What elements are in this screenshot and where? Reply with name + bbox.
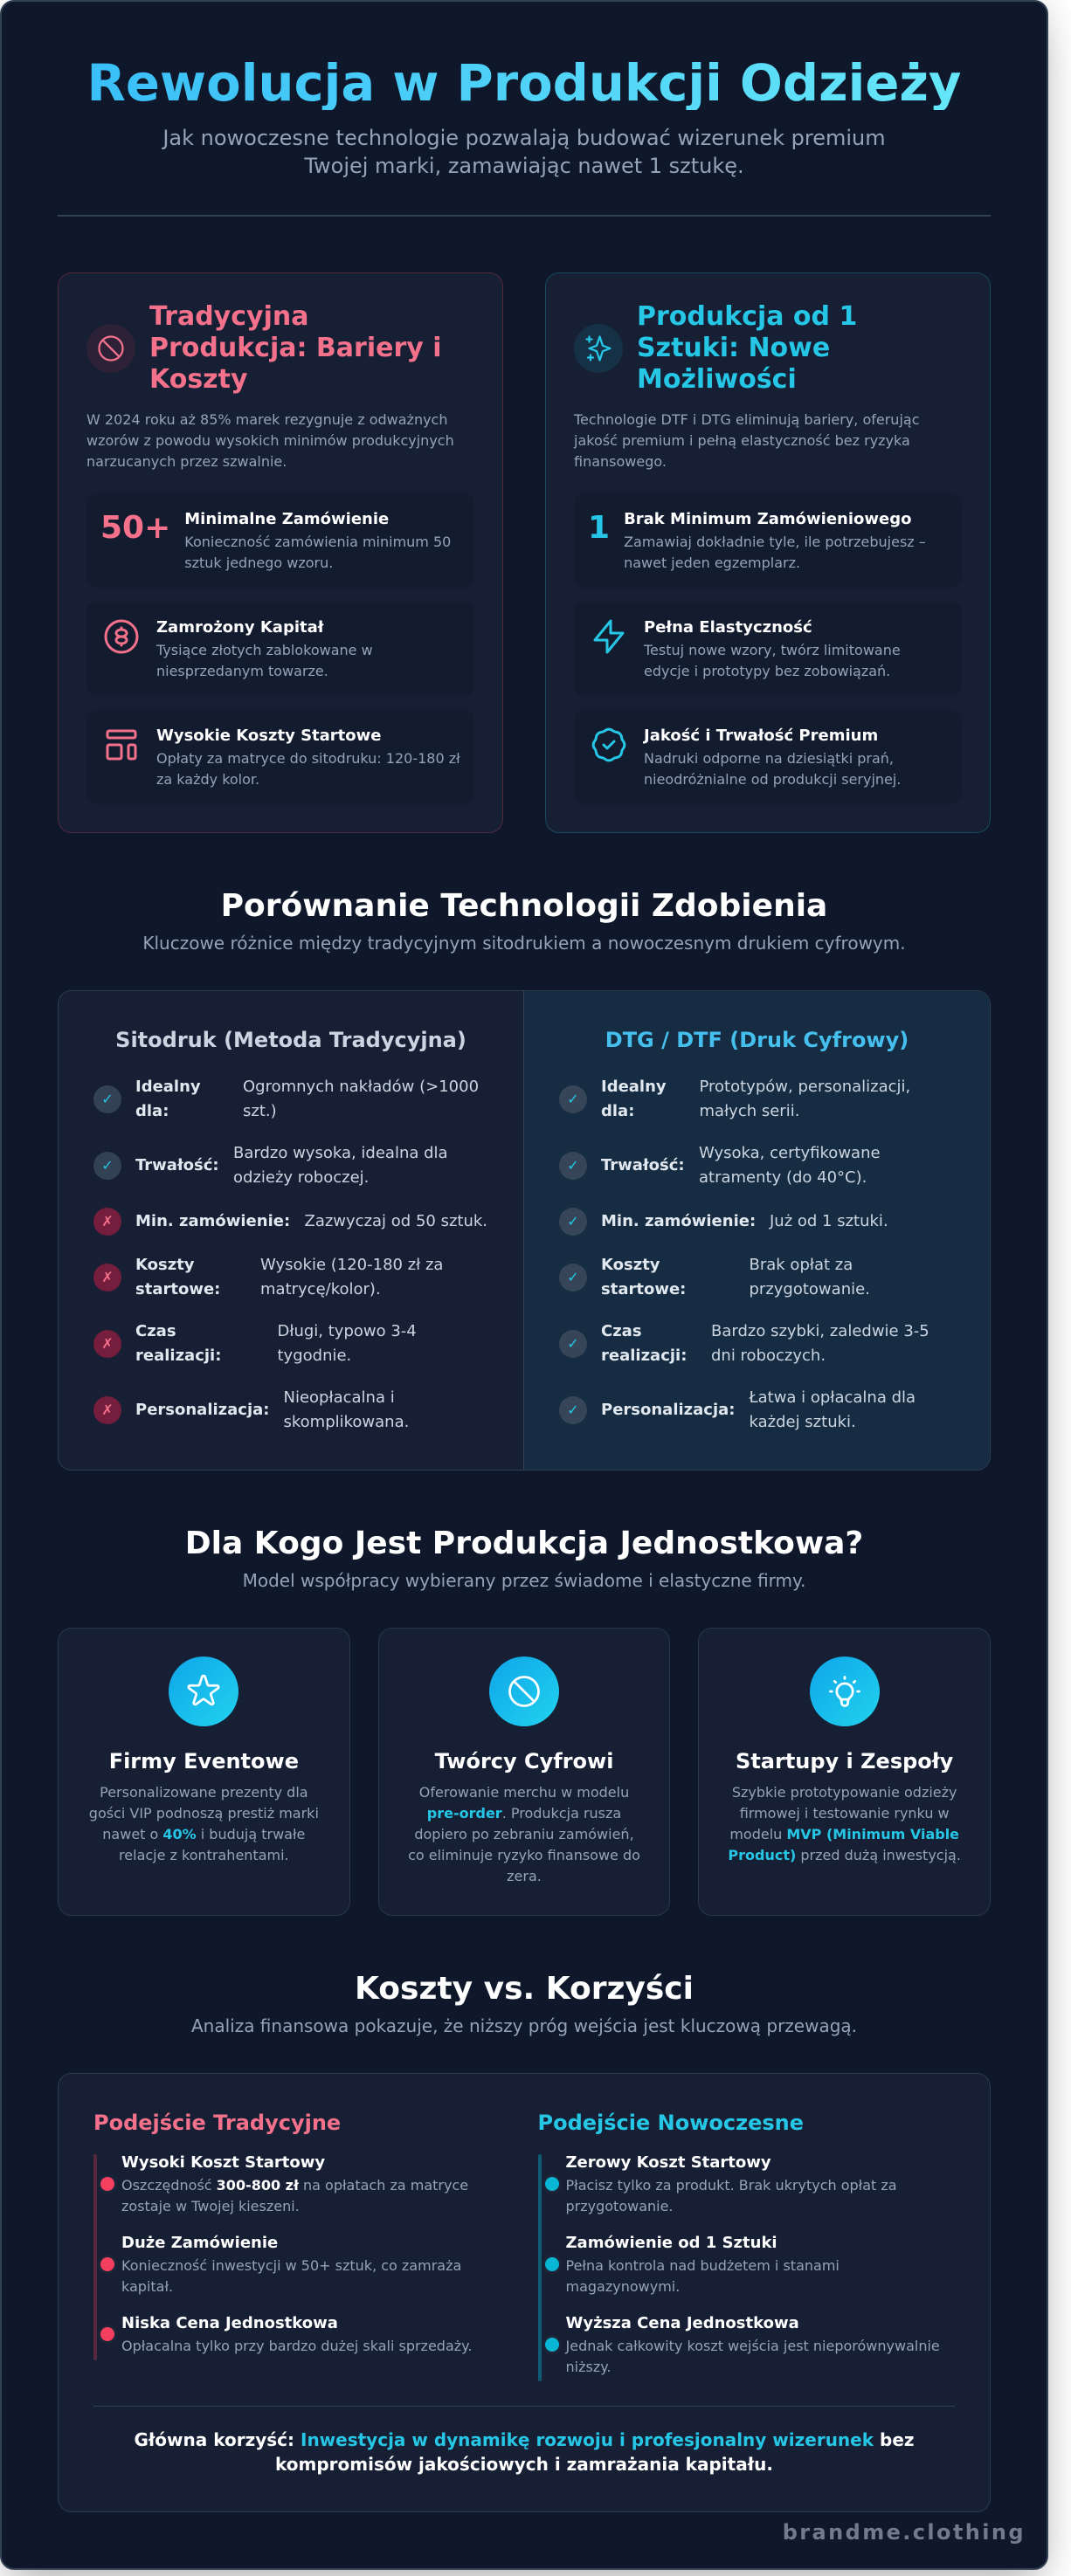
column: screen printing: Sitodruk (Metoda Tradycyjna) bbox=[115, 1028, 466, 1052]
card: startups: Startupy i Zespoły bbox=[736, 1749, 953, 1774]
row: personalization: Łatwa i opłacalna dla bbox=[750, 1388, 916, 1407]
stat: flexibility: Testuj nowe wzory, twórz limitowane bbox=[644, 642, 901, 658]
stat: premium quality bbox=[574, 710, 962, 804]
icon: ban bbox=[489, 1656, 559, 1726]
item: high startup cost: Oszczędność 300-800 zł na opłatach za matryce bbox=[121, 2177, 468, 2194]
intro text: traditional bbox=[86, 411, 454, 470]
item: large order: Konieczność inwestycji w 50+ sztuk, co zamraża bbox=[121, 2257, 461, 2274]
card: event companies: nawet o 40% i budują trwałe bbox=[102, 1826, 305, 1842]
row: durability: ✓ bbox=[101, 1157, 114, 1174]
row: minimum order: Zazwyczaj od 50 sztuk. bbox=[304, 1212, 487, 1230]
stat: minimum order bbox=[86, 493, 474, 588]
row: lead time bbox=[559, 1322, 929, 1365]
card: digital creators: co eliminuje ryzyko finansowe do bbox=[408, 1847, 640, 1863]
column: screen printing bbox=[93, 1028, 487, 1431]
column: traditional approach bbox=[93, 2111, 472, 2360]
section heading: audience: Model współpracy wybierany przez świadome i elastyczne firmy. bbox=[243, 1570, 805, 1591]
row: ideal for bbox=[93, 1078, 479, 1120]
row: minimum order: Min. zamówienie: bbox=[135, 1212, 290, 1230]
section heading: audience bbox=[185, 1526, 863, 1591]
timeline: modern bbox=[538, 2153, 940, 2381]
row: lead time: Długi, typowo 3-4 bbox=[278, 1322, 417, 1340]
stat: no minimum bbox=[574, 493, 962, 588]
card: digital creators: Oferowanie merchu w modelu bbox=[419, 1784, 629, 1801]
row: startup costs: matrycę/kolor). bbox=[260, 1280, 381, 1298]
item: high startup cost: zostaje w Twojej kieszeni. bbox=[121, 2198, 300, 2214]
row: startup costs: Koszty bbox=[601, 1256, 660, 1274]
row: minimum order: Już od 1 sztuki. bbox=[770, 1212, 888, 1230]
icon: light bulb bbox=[810, 1656, 880, 1726]
card: startups: Product) przed dużą inwestycją. bbox=[728, 1847, 961, 1863]
item: order from one: Pełna kontrola nad budżetem i stanami bbox=[566, 2257, 840, 2274]
row: startup costs: startowe: bbox=[135, 1280, 220, 1298]
item: order from one: magazynowymi. bbox=[566, 2278, 680, 2295]
row: lead time bbox=[93, 1322, 417, 1365]
item: large order bbox=[100, 2234, 461, 2295]
item: large order: Duże Zamówienie bbox=[121, 2234, 278, 2252]
card: startups: firmowej i testowanie rynku w bbox=[740, 1805, 950, 1822]
row: ideal for bbox=[559, 1078, 910, 1120]
item: large order: kapitał. bbox=[121, 2278, 173, 2295]
section heading: comparison: Kluczowe różnice między tradycyjnym sitodrukiem a nowoczesnym drukiem cyfrowym. bbox=[142, 933, 906, 954]
subtitle bbox=[162, 126, 886, 178]
section heading: comparison bbox=[142, 888, 906, 954]
intro text: modern: finansowego. bbox=[574, 453, 667, 470]
heading: modern: Możliwości bbox=[637, 364, 797, 395]
row: personalization: Nieopłacalna i bbox=[283, 1388, 395, 1407]
conclusion callout: Główna korzyść: Inwestycja w dynamikę rozwoju i profesjonalny wizerunek bez bbox=[134, 2429, 915, 2450]
row: personalization: Personalizacja: bbox=[601, 1401, 735, 1419]
item: higher unit price: Jednak całkowity koszt wejścia jest nieporównywalnie bbox=[566, 2338, 940, 2354]
row: ideal for: Ogromnych nakładów (>1000 bbox=[243, 1078, 479, 1096]
row: ideal for: ✓ bbox=[567, 1091, 579, 1107]
stat: premium quality: nieodróżnialne od produkcji seryjnej. bbox=[644, 771, 901, 788]
brand footer: brandme.clothing bbox=[783, 2520, 1026, 2545]
section heading: costs: Analiza finansowa pokazuje, że niższy próg wejścia jest kluczową przewagą. bbox=[191, 2015, 857, 2036]
item: higher unit price: niższy. bbox=[566, 2359, 612, 2375]
icon: star bbox=[169, 1656, 238, 1726]
row: durability: Wysoka, certyfikowane bbox=[699, 1144, 881, 1162]
column: modern approach: Podejście Nowoczesne bbox=[538, 2111, 804, 2135]
row: ideal for: ✓ bbox=[101, 1091, 114, 1107]
stat: no minimum: Brak Minimum Zamówieniowego bbox=[624, 510, 911, 528]
row: durability: Trwałość: bbox=[135, 1156, 219, 1174]
item: higher unit price: Wyższa Cena Jednostkowa bbox=[566, 2314, 799, 2332]
row: personalization: Personalizacja: bbox=[135, 1401, 269, 1419]
row: ideal for: szt.) bbox=[243, 1102, 277, 1120]
intro text: traditional: wzorów z powodu wysokich minimów produkcyjnych bbox=[86, 432, 454, 449]
section heading: costs: Koszty vs. Korzyści bbox=[355, 1971, 694, 2007]
section heading: costs bbox=[191, 1971, 857, 2036]
two approach columns bbox=[93, 2111, 940, 2381]
row: minimum order: ✗ bbox=[101, 1213, 114, 1229]
stat: minimum order: sztuk jednego wzoru. bbox=[184, 554, 333, 571]
row: minimum order bbox=[93, 1208, 487, 1236]
stat: premium quality: Jakość i Trwałość Premium bbox=[644, 727, 878, 745]
row: startup costs: ✓ bbox=[567, 1269, 579, 1285]
stat: no minimum: Zamawiaj dokładnie tyle, ile potrzebujesz – bbox=[624, 534, 926, 550]
row: durability bbox=[559, 1144, 881, 1187]
row: durability bbox=[93, 1144, 448, 1187]
row: lead time: realizacji: bbox=[601, 1347, 687, 1365]
column: traditional approach: Podejście Tradycyjne bbox=[93, 2111, 341, 2135]
row: durability: Bardzo wysoka, idealna dla bbox=[233, 1144, 448, 1162]
row: lead time: ✓ bbox=[567, 1335, 579, 1352]
card: event companies: Personalizowane prezenty dla bbox=[100, 1784, 308, 1801]
intro text: modern bbox=[573, 411, 919, 470]
stat: minimum order: Konieczność zamówienia minimum 50 bbox=[184, 534, 451, 550]
panel heading: traditional bbox=[86, 301, 442, 395]
column: digital printing: DTG / DTF (Druk Cyfrowy) bbox=[605, 1028, 909, 1052]
column: modern approach bbox=[538, 2111, 940, 2381]
item: low unit price: Niska Cena Jednostkowa bbox=[121, 2314, 338, 2332]
row: minimum order: Min. zamówienie: bbox=[601, 1212, 756, 1230]
heading: traditional bbox=[149, 301, 442, 395]
heading: traditional: Koszty bbox=[149, 364, 248, 395]
stat: minimum order: 50+ bbox=[100, 510, 170, 546]
card: event companies bbox=[58, 1628, 350, 1916]
row: personalization: każdej sztuki. bbox=[750, 1413, 856, 1431]
card: digital creators bbox=[378, 1628, 670, 1916]
heading: modern bbox=[637, 301, 857, 395]
stat: startup costs: Wysokie Koszty Startowe bbox=[156, 727, 381, 745]
stat: frozen capital: Tysiące złotych zablokowane w bbox=[156, 642, 373, 658]
stat: startup costs bbox=[86, 710, 474, 804]
row: personalization bbox=[93, 1388, 409, 1431]
row: ideal for: małych serii. bbox=[699, 1102, 799, 1120]
item: zero startup cost: Płacisz tylko za produkt. Brak ukrytych opłat za bbox=[566, 2177, 897, 2194]
stat list: traditional bbox=[100, 510, 460, 788]
row: startup costs: Koszty bbox=[135, 1256, 195, 1274]
stat: flexibility: Pełna Elastyczność bbox=[644, 618, 812, 637]
panel: production from one piece bbox=[545, 272, 991, 833]
two comparison panels bbox=[58, 272, 991, 833]
intro text: modern: jakość premium i pełną elastyczność bez ryzyka bbox=[574, 432, 910, 449]
card: digital creators: Twórcy Cyfrowi bbox=[435, 1749, 613, 1774]
row: startup costs: Brak opłat za bbox=[750, 1256, 853, 1274]
stat list: modern bbox=[588, 510, 926, 788]
item: order from one bbox=[545, 2234, 840, 2295]
icon: sparkles bbox=[574, 324, 623, 373]
heading: modern: Sztuki: Nowe bbox=[637, 333, 830, 363]
card: startups: modelu MVP (Minimum Viable bbox=[729, 1826, 959, 1842]
item: high startup cost bbox=[100, 2153, 468, 2214]
card: digital creators: dopiero po zebraniu zamówień, bbox=[414, 1826, 634, 1842]
conclusion callout: kompromisów jakościowych i zamrażania kapitału. bbox=[275, 2454, 773, 2475]
row: lead time: ✗ bbox=[101, 1335, 114, 1352]
panel heading: modern bbox=[574, 301, 857, 395]
row: startup costs: Wysokie (120-180 zł za bbox=[260, 1256, 443, 1274]
row: durability: atramenty (do 40°C). bbox=[699, 1168, 867, 1187]
row: lead time: realizacji: bbox=[135, 1347, 221, 1365]
row: lead time: tygodnie. bbox=[278, 1347, 351, 1365]
row: minimum order bbox=[559, 1208, 888, 1236]
timeline: traditional bbox=[93, 2153, 472, 2360]
intro text: modern: Technologie DTF i DTG eliminują bariery, oferując bbox=[574, 411, 919, 428]
stat: minimum order: Minimalne Zamówienie bbox=[184, 510, 389, 528]
heading: traditional: Produkcja: Bariery i bbox=[149, 333, 442, 363]
row: durability: ✓ bbox=[567, 1157, 579, 1174]
heading: traditional: Tradycyjna bbox=[149, 301, 308, 332]
row: ideal for: dla: bbox=[601, 1102, 634, 1120]
comparison table bbox=[58, 990, 991, 1471]
column: digital printing bbox=[523, 991, 990, 1470]
stat: no minimum: nawet jeden egzemplarz. bbox=[624, 554, 800, 571]
row: lead time: dni roboczych. bbox=[711, 1347, 826, 1365]
card: event companies: Firmy Eventowe bbox=[109, 1749, 299, 1774]
row: ideal for: Idealny bbox=[135, 1078, 201, 1096]
row: ideal for: dla: bbox=[135, 1102, 169, 1120]
intro text: traditional: narzucanych przez szwalnie. bbox=[86, 453, 287, 470]
section heading: comparison: Porównanie Technologii Zdobienia bbox=[221, 888, 827, 924]
row: durability: odzieży roboczej. bbox=[233, 1168, 369, 1187]
heading: modern: Produkcja od 1 bbox=[637, 301, 857, 332]
stat: startup costs: Opłaty za matryce do sitodruku: 120-180 zł bbox=[156, 750, 460, 767]
panel: costs vs benefits bbox=[58, 2073, 991, 2512]
card: startups: Szybkie prototypowanie odzieży bbox=[732, 1784, 957, 1801]
row: personalization bbox=[559, 1388, 916, 1431]
card: digital creators: zera. bbox=[507, 1868, 542, 1884]
item: zero startup cost: przygotowanie. bbox=[566, 2198, 674, 2214]
stat: frozen capital bbox=[86, 602, 474, 696]
row: personalization: skomplikowana. bbox=[283, 1413, 409, 1431]
item: order from one: Zamówienie od 1 Sztuki bbox=[566, 2234, 777, 2252]
row: startup costs: startowe: bbox=[601, 1280, 686, 1298]
row: personalization: ✗ bbox=[101, 1402, 114, 1418]
stat: flexibility: edycje i prototypy bez zobowiązań. bbox=[644, 663, 890, 679]
row: startup costs: przygotowanie. bbox=[750, 1280, 870, 1298]
item: zero startup cost bbox=[545, 2153, 897, 2214]
subtitle: Jak nowoczesne technologie pozwalają budować wizerunek premium bbox=[162, 126, 886, 150]
item: low unit price: Opłacalna tylko przy bardzo dużej skali sprzedaży. bbox=[121, 2338, 472, 2354]
row: minimum order: ✓ bbox=[567, 1213, 579, 1229]
card: digital creators: pre-order. Produkcja rusza bbox=[427, 1805, 621, 1822]
row: lead time: Czas bbox=[601, 1322, 642, 1340]
subtitle: Twojej marki, zamawiając nawet 1 sztukę. bbox=[304, 154, 744, 178]
card: event companies: relacje z kontrahentami. bbox=[119, 1847, 289, 1863]
row: startup costs bbox=[93, 1256, 443, 1298]
row: startup costs: ✗ bbox=[101, 1269, 114, 1285]
item: high startup cost: Wysoki Koszt Startowy bbox=[121, 2153, 325, 2172]
stat: flexibility bbox=[574, 602, 962, 696]
audience cards bbox=[58, 1628, 991, 1916]
item: zero startup cost: Zerowy Koszt Startowy bbox=[566, 2153, 771, 2172]
conclusion callout bbox=[93, 2406, 955, 2476]
item: higher unit price bbox=[545, 2314, 940, 2375]
intro text: traditional: W 2024 roku aż 85% marek rezygnuje z odważnych bbox=[86, 411, 447, 428]
row: personalization: ✓ bbox=[567, 1402, 579, 1418]
card: startups bbox=[698, 1628, 991, 1916]
stat: no minimum: 1 bbox=[588, 510, 610, 546]
section heading: audience: Dla Kogo Jest Produkcja Jednostkowa? bbox=[185, 1526, 863, 1561]
row: durability: Trwałość: bbox=[601, 1156, 685, 1174]
stat: premium quality: Nadruki odporne na dziesiątki prań, bbox=[644, 750, 894, 767]
row: ideal for: Prototypów, personalizacji, bbox=[699, 1078, 910, 1096]
stat: frozen capital: niesprzedanym towarze. bbox=[156, 663, 328, 679]
row: startup costs bbox=[559, 1256, 870, 1298]
panel: traditional production bbox=[58, 272, 503, 833]
stat: frozen capital: Zamrożony Kapitał bbox=[156, 618, 323, 637]
title: Rewolucja w Produkcji Odzieży bbox=[87, 54, 961, 113]
icon: ban bbox=[86, 324, 135, 373]
stat: startup costs: za każdy kolor. bbox=[156, 771, 259, 788]
card: event companies: gości VIP podnoszą prestiż marki bbox=[89, 1805, 319, 1822]
row: lead time: Bardzo szybki, zaledwie 3-5 bbox=[711, 1322, 929, 1340]
header bbox=[58, 58, 991, 217]
item: low unit price bbox=[100, 2314, 472, 2354]
row: lead time: Czas bbox=[135, 1322, 176, 1340]
row: ideal for: Idealny bbox=[601, 1078, 667, 1096]
